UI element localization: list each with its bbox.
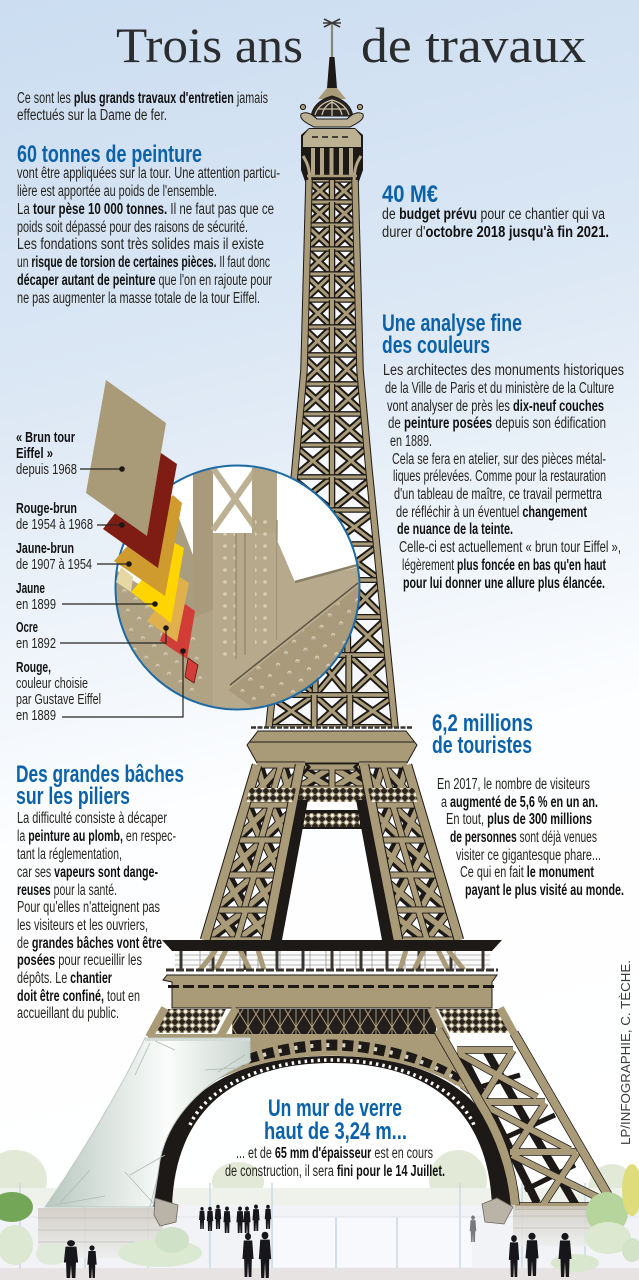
label: ocre: Ocre — [16, 620, 38, 636]
label: jaune-brun: Jaune-brun — [16, 541, 74, 557]
upper shaft lattice — [268, 180, 396, 727]
text: 60 tonnes: vont être appliquées sur la tour. Une attention particu- — [17, 165, 280, 182]
intro text — [17, 90, 268, 124]
antenna — [318, 19, 346, 99]
text: touristes: de personnes sont déjà venues — [450, 829, 597, 846]
text: 60 tonnes: La tour pèse 10 000 tonnes. Il ne faut pas que ce — [17, 201, 274, 218]
magnified circle — [108, 466, 362, 720]
text: analyse: de réfléchir à un éventuel changement — [396, 504, 587, 521]
middle legs — [205, 765, 459, 940]
heading: analyse: Une analyse fine — [382, 310, 522, 337]
text: budget — [382, 206, 609, 241]
text: bâches: dépôts. Le chantier — [17, 970, 112, 987]
text: bâches: La difficulté consiste à décaper — [17, 810, 167, 827]
label: brun tour Eiffel — [16, 430, 77, 478]
right leg — [438, 1030, 608, 1207]
credit: LP/INFOGRAPHIE, C. TÈCHE. — [618, 960, 633, 1145]
heading: touristes: de touristes — [432, 732, 532, 759]
text: budget: durer d'octobre 2018 jusqu'à fin 2021. — [382, 224, 609, 241]
text: bâches: accueillant du public. — [17, 1005, 119, 1022]
text: analyse: vont analyser de près les dix-neuf couches — [387, 398, 604, 415]
text: budget: de budget prévu pour ce chantier qui va — [382, 206, 605, 223]
text: analyse: de nuance de la teinte. — [397, 521, 513, 538]
label: ocre: en 1892 — [16, 636, 56, 652]
text: bâches: reuses pour la santé. — [17, 882, 117, 899]
text: 60 tonnes: décaper autant de peinture que l'on en rajoute pour — [17, 272, 272, 289]
text: bâches: doit être confiné, tout en — [17, 988, 140, 1005]
label: jaune — [16, 581, 56, 613]
tarpaulin over pillar — [45, 1038, 250, 1207]
cupola — [300, 96, 363, 127]
label: rouge-brun: de 1954 à 1968 — [16, 517, 93, 533]
text: 60 tonnes: Les fondations sont très solides mais il existe — [17, 236, 264, 253]
stone bases — [38, 1198, 593, 1258]
heading: bâches: Des grandes bâches — [16, 761, 184, 788]
label: rouge: Rouge, — [16, 660, 51, 676]
background trees — [0, 1150, 639, 1216]
text: 60 tonnes — [17, 165, 280, 307]
ground and glass wall — [0, 1183, 639, 1280]
label: rouge: couleur choisie — [16, 676, 88, 692]
text: bâches: la peinture au plomb, en respec- — [17, 828, 176, 845]
label: brun tour Eiffel: « Brun tour — [16, 430, 75, 446]
text: bâches: car ses vapeurs sont dange- — [17, 864, 158, 881]
paint swatch: rouge small — [185, 658, 198, 683]
heading: mur de verre: haut de 3,24 m... — [264, 1118, 407, 1145]
heading: touristes — [432, 710, 533, 759]
upper platform — [247, 728, 417, 769]
paint swatch: brun — [86, 380, 166, 536]
text: bâches: tant la réglementation, — [17, 846, 122, 863]
title — [116, 17, 586, 73]
arch — [153, 1054, 511, 1207]
upper shaft edges — [269, 180, 395, 727]
intro text: effectués sur la Dame de fer. — [17, 107, 167, 124]
paint swatch: primer — [116, 567, 133, 592]
title: Trois ans — [116, 17, 303, 73]
heading: 40 M€: 40 M€ — [382, 181, 438, 208]
label: brun tour Eiffel: Eiffel » — [16, 446, 53, 462]
label: brun tour Eiffel: depuis 1968 — [16, 462, 77, 478]
text: 60 tonnes: un risque de torsion de certaines pièces. Il faut donc — [17, 254, 270, 271]
top cabin — [301, 128, 363, 187]
middle lattice between legs — [296, 767, 374, 829]
label: jaune: Jaune — [16, 581, 45, 597]
people — [64, 1205, 571, 1278]
intro text: Ce sont les plus grands travaux d'entretien jamais — [17, 90, 268, 107]
first floor railing — [162, 940, 502, 970]
paint swatch: jaune-brun — [114, 495, 182, 596]
text: 60 tonnes: lière est apportée au poids de l'ensemble. — [17, 183, 217, 200]
lower lattice band — [148, 1008, 516, 1040]
first floor platform — [163, 970, 498, 1008]
text: mur de verre — [225, 1145, 445, 1180]
paint swatch: rouge — [160, 604, 195, 659]
label: rouge-brun — [16, 501, 93, 533]
heading: bâches — [16, 761, 184, 810]
text: mur de verre: ... et de 65 mm d'épaisseur est en cours — [236, 1145, 433, 1162]
text: bâches: posées pour recueillir les — [17, 952, 142, 969]
title: de travaux — [361, 17, 586, 73]
text: bâches — [17, 810, 176, 1022]
heading: analyse — [382, 310, 522, 359]
label: jaune-brun — [16, 541, 92, 573]
text: 60 tonnes: ne pas augmenter la masse totale de la tour Eiffel. — [17, 290, 260, 307]
label: rouge: en 1889 — [16, 708, 56, 724]
text: touristes: En tout, plus de 300 millions — [446, 811, 592, 828]
foreground trees and bushes — [0, 1164, 639, 1272]
paint layers detail — [16, 380, 362, 724]
text: mur de verre: de construction, il sera fini pour le 14 Juillet. — [225, 1163, 445, 1180]
label: rouge: par Gustave Eiffel — [16, 692, 101, 708]
heading: bâches: sur les piliers — [16, 783, 130, 810]
label: rouge — [16, 660, 101, 724]
text: touristes — [437, 776, 624, 899]
text: analyse: de peinture posées depuis son édification — [388, 415, 606, 432]
label: jaune-brun: de 1907 à 1954 — [16, 557, 92, 573]
paint swatch: rouge-brun — [103, 453, 177, 568]
text: analyse — [383, 362, 624, 592]
label: ocre — [16, 620, 56, 652]
label: jaune: en 1899 — [16, 597, 56, 613]
heading: analyse: des couleurs — [382, 332, 490, 359]
paint swatch: ocre — [147, 577, 189, 642]
heading: touristes: 6,2 millions — [432, 710, 533, 737]
text: 60 tonnes: poids soit dépassé pour des raisons de sécurité. — [17, 219, 248, 236]
label: rouge-brun: Rouge-brun — [16, 501, 77, 517]
heading: mur de verre — [264, 1095, 407, 1145]
paint swatch: jaune — [131, 543, 184, 623]
text: bâches: Pour qu'elles n'atteignent pas — [17, 899, 160, 916]
heading: 60 tonnes: 60 tonnes de peinture — [17, 141, 202, 168]
spandrel — [183, 1036, 481, 1104]
heading: mur de verre: Un mur de verre — [268, 1095, 402, 1122]
text: touristes: Ce qui en fait le monument — [460, 864, 594, 881]
text: bâches: de grandes bâches vont être — [17, 935, 162, 952]
text: bâches: les visiteurs et les ouvriers, — [17, 917, 148, 934]
leader lines — [60, 466, 186, 717]
text: analyse: en 1889. — [390, 433, 432, 450]
